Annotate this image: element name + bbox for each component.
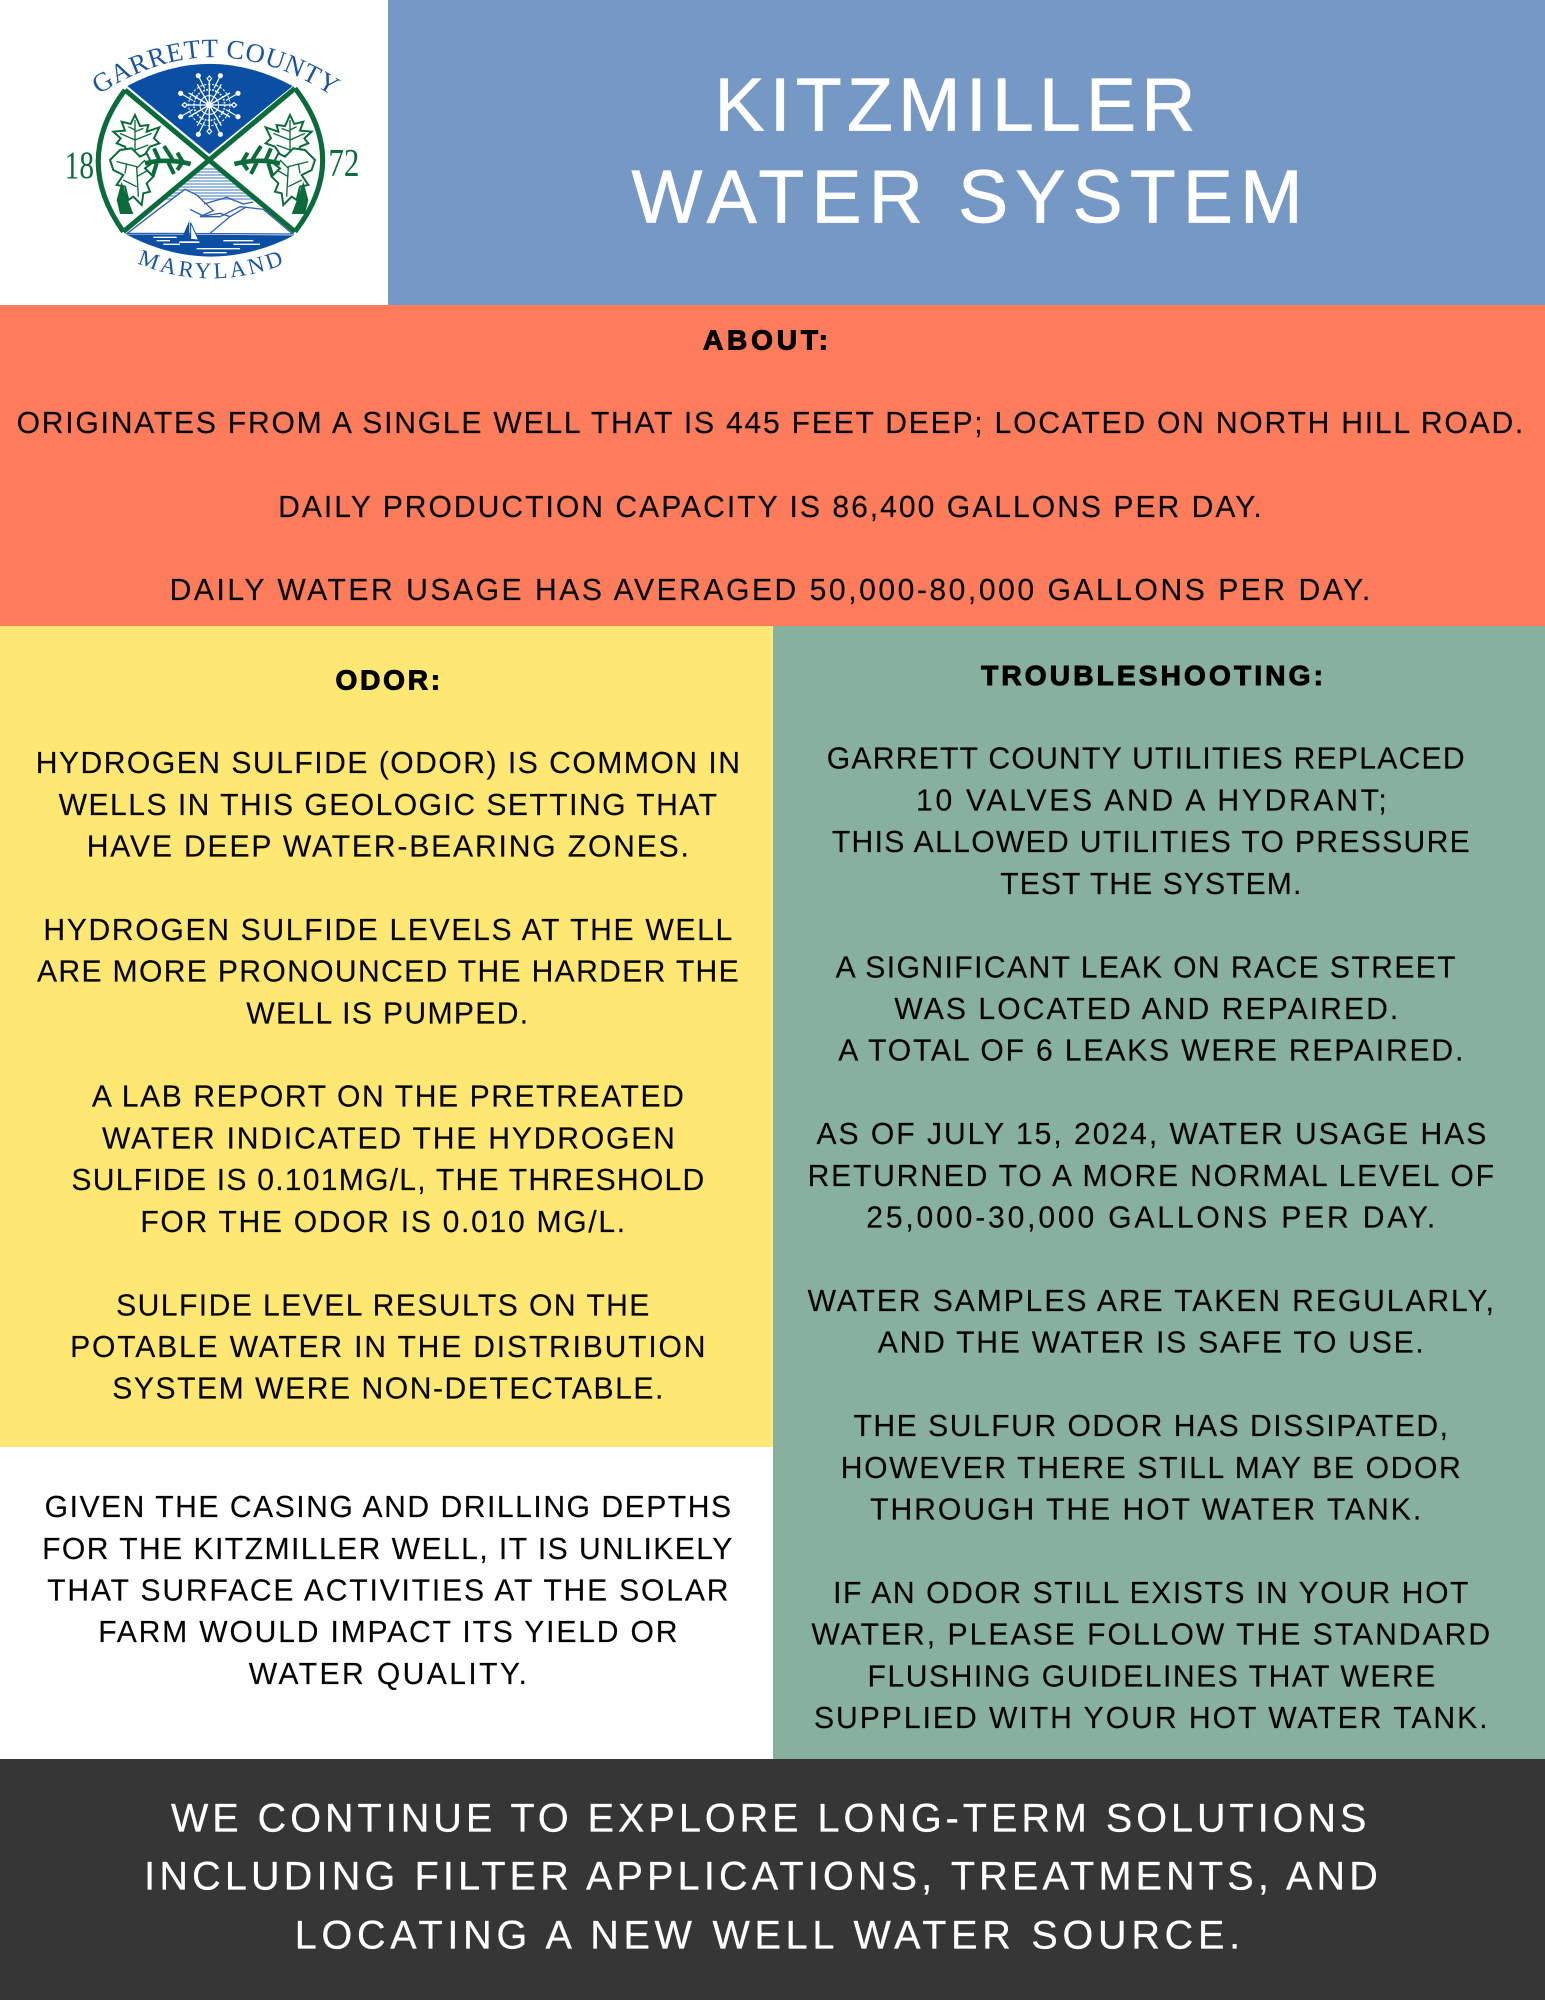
troubleshooting text: GARRETT COUNTY UTILITIES REPLACED	[827, 743, 1465, 776]
odor text: HYDROGEN SULFIDE LEVELS AT THE WELL	[43, 914, 732, 947]
troubleshooting text: WAS LOCATED AND REPAIRED.	[894, 993, 1398, 1026]
troubleshooting text: IF AN ODOR STILL EXISTS IN YOUR HOT	[833, 1577, 1468, 1610]
panel: solar farm note	[0, 1447, 773, 1759]
troubleshooting text: 10 VALVES AND A HYDRANT;	[916, 784, 1387, 817]
panel: footer	[0, 1759, 1545, 2000]
icon: leaves and pine branch right	[234, 115, 315, 214]
lake highlights	[153, 237, 260, 253]
odor text: FOR THE ODOR IS 0.010 MG/L.	[140, 1206, 625, 1239]
icon: leaves and pine branch left	[110, 115, 191, 214]
icon: snowflake	[179, 74, 240, 136]
troubleshooting heading: TROUBLESHOOTING:	[981, 660, 1323, 691]
footer text: INCLUDING FILTER APPLICATIONS, TREATMENTS, AND	[144, 1855, 1378, 1899]
seal text: Maryland: MARYLAND	[138, 250, 282, 278]
odor text: WELLS IN THIS GEOLOGIC SETTING THAT	[59, 789, 717, 822]
footer text: LOCATING A NEW WELL WATER SOURCE.	[295, 1914, 1240, 1958]
seal text: 18: 18	[65, 143, 94, 187]
title	[632, 63, 1303, 239]
about text: DAILY PRODUCTION CAPACITY IS 86,400 GALLONS PER DAY.	[278, 491, 1262, 524]
troubleshooting text: 25,000-30,000 GALLONS PER DAY.	[866, 1202, 1435, 1235]
troubleshooting text: THIS ALLOWED UTILITIES TO PRESSURE	[832, 826, 1470, 859]
troubleshooting text: AS OF JULY 15, 2024, WATER USAGE HAS	[817, 1118, 1486, 1151]
seal text: 72: 72	[328, 140, 359, 184]
odor heading: ODOR:	[336, 664, 440, 695]
solar farm text: THAT SURFACE ACTIVITIES AT THE SOLAR	[47, 1575, 728, 1608]
about text	[17, 407, 1523, 607]
panel: title banner	[388, 0, 1545, 305]
solar farm text	[42, 1491, 732, 1691]
troubleshooting text: THE SULFUR ODOR HAS DISSIPATED,	[854, 1410, 1448, 1443]
troubleshooting text: WATER SAMPLES ARE TAKEN REGULARLY,	[808, 1285, 1494, 1318]
footer text: WE CONTINUE TO EXPLORE LONG-TERM SOLUTIONS	[171, 1797, 1366, 1841]
solar farm text: FOR THE KITZMILLER WELL, IT IS UNLIKELY	[42, 1533, 732, 1566]
mountains	[127, 189, 293, 234]
odor text	[36, 747, 740, 1406]
solar farm text: WATER QUALITY.	[249, 1658, 527, 1691]
odor text: WATER INDICATED THE HYDROGEN	[102, 1122, 675, 1155]
odor text: ARE MORE PRONOUNCED THE HARDER THE	[37, 956, 739, 989]
odor text: SULFIDE IS 0.101MG/L, THE THRESHOLD	[71, 1164, 704, 1197]
odor text: WELL IS PUMPED.	[246, 997, 528, 1030]
about text: DAILY WATER USAGE HAS AVERAGED 50,000-80,000 GALLONS PER DAY.	[170, 574, 1370, 607]
troubleshooting text: RETURNED TO A MORE NORMAL LEVEL OF	[808, 1160, 1494, 1193]
title: KITZMILLER	[714, 63, 1195, 147]
troubleshooting text: TEST THE SYSTEM.	[1000, 868, 1301, 901]
seal top blue field	[127, 64, 293, 154]
panel: odor	[0, 626, 773, 1447]
odor text: A LAB REPORT ON THE PRETREATED	[92, 1081, 684, 1114]
lake	[126, 234, 294, 257]
panel: troubleshooting	[773, 626, 1545, 1759]
odor text: SULFIDE LEVEL RESULTS ON THE	[116, 1289, 649, 1322]
seal text: Garrett County: GARRETT COUNTY	[94, 40, 341, 93]
sky stripes	[162, 169, 257, 199]
troubleshooting text: THROUGH THE HOT WATER TANK.	[870, 1494, 1421, 1527]
panel: about	[0, 305, 1545, 626]
troubleshooting text: HOWEVER THERE STILL MAY BE ODOR	[841, 1452, 1461, 1485]
odor text: HYDROGEN SULFIDE (ODOR) IS COMMON IN	[36, 747, 740, 780]
troubleshooting text: WATER, PLEASE FOLLOW THE STANDARD	[811, 1619, 1490, 1652]
troubleshooting text: A SIGNIFICANT LEAK ON RACE STREET	[836, 951, 1456, 984]
solar farm text: FARM WOULD IMPACT ITS YIELD OR	[98, 1616, 677, 1649]
panel: logo background	[0, 0, 388, 305]
about text: ORIGINATES FROM A SINGLE WELL THAT IS 445 FEET DEEP; LOCATED ON NORTH HILL ROAD.	[17, 407, 1523, 440]
seal green frame	[98, 88, 323, 232]
odor text: SYSTEM WERE NON-DETECTABLE.	[112, 1373, 663, 1406]
troubleshooting text: A TOTAL OF 6 LEAKS WERE REPAIRED.	[838, 1035, 1463, 1068]
troubleshooting text	[808, 743, 1494, 1735]
logo: Garrett County seal	[65, 40, 359, 278]
troubleshooting text: FLUSHING GUIDELINES THAT WERE	[868, 1660, 1435, 1693]
solar farm text: GIVEN THE CASING AND DRILLING DEPTHS	[45, 1491, 731, 1524]
about heading: ABOUT:	[703, 324, 828, 355]
odor text: HAVE DEEP WATER-BEARING ZONES.	[87, 831, 689, 864]
footer text	[144, 1797, 1378, 1958]
title: WATER SYSTEM	[632, 155, 1303, 239]
odor text: POTABLE WATER IN THE DISTRIBUTION	[70, 1331, 706, 1364]
troubleshooting text: SUPPLIED WITH YOUR HOT WATER TANK.	[814, 1702, 1488, 1735]
troubleshooting text: AND THE WATER IS SAFE TO USE.	[878, 1327, 1424, 1360]
icon: sailboat	[179, 221, 199, 243]
